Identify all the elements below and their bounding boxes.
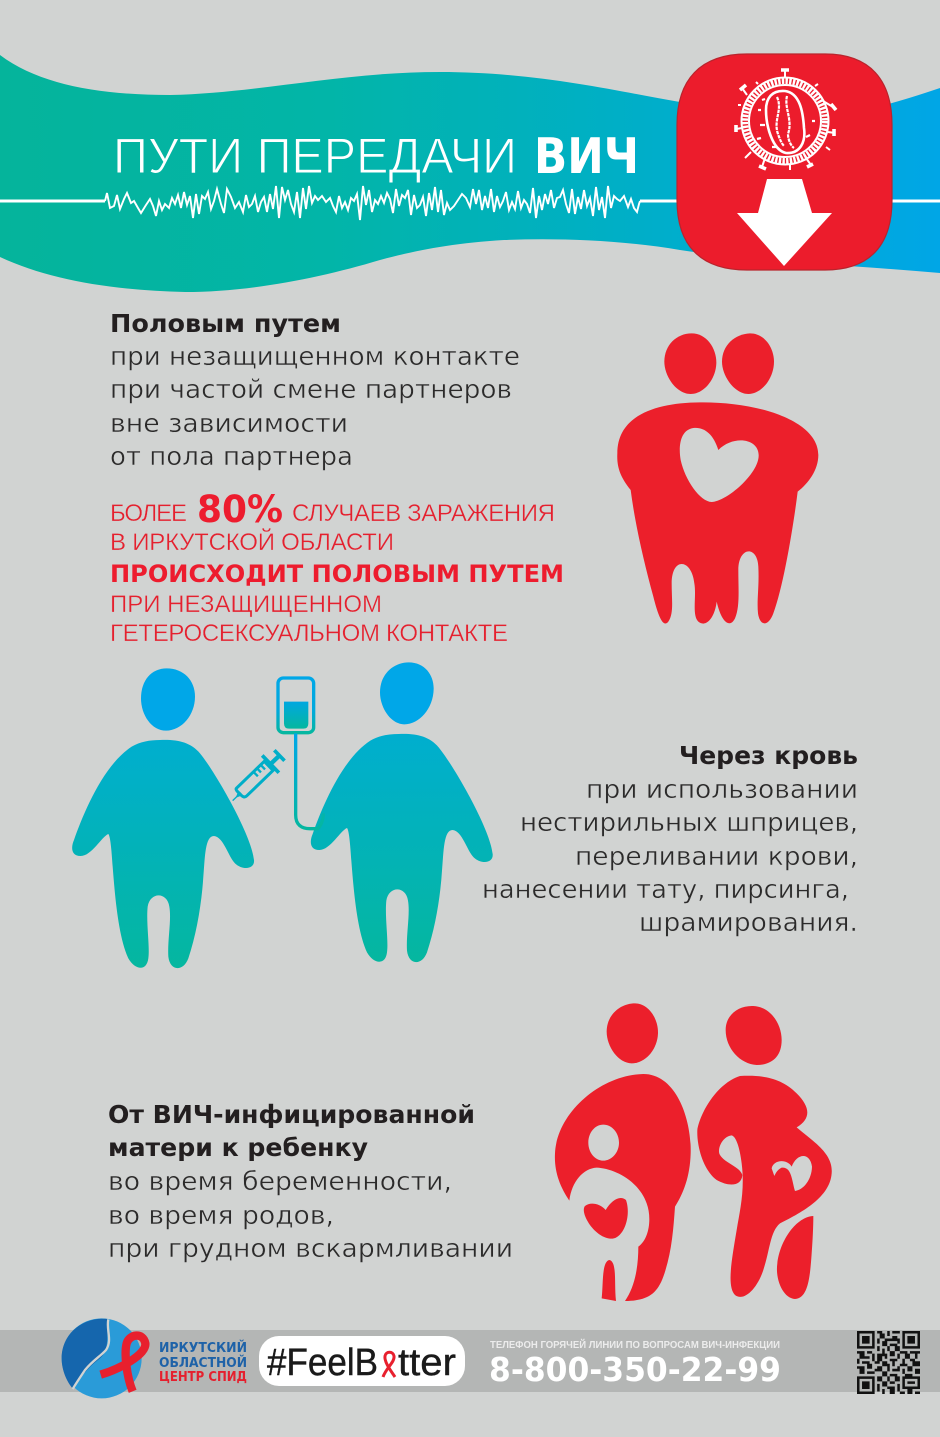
red badge [677, 54, 892, 270]
figure with child [555, 1003, 691, 1301]
text: 80 percent statistic: ГЕТЕРОСЕКСУАЛЬНОМ КОНТАКТЕ [110, 620, 508, 647]
hashtag pill [259, 1336, 465, 1386]
text: 80 percent statistic [110, 488, 564, 647]
logo: regional AIDS centre: ЦЕНТР СПИД [159, 1370, 247, 1385]
icon: HIV virus [736, 70, 836, 170]
hashtag pill: tter [398, 1342, 456, 1384]
text: mother to child transmission: во время родов, [108, 1201, 334, 1231]
text: mother to child transmission: во время беременности, [108, 1167, 452, 1197]
text: blood transmission: нанесении тату, пирсинга, [482, 875, 849, 905]
text: blood transmission: при использовании [586, 775, 858, 805]
text: blood transmission: Через кровь [679, 741, 858, 770]
pregnant figure [697, 1006, 832, 1299]
icon: couple with heart [617, 333, 818, 624]
text: sexual transmission: Половым путем [110, 309, 341, 338]
title: ПУТИ ПЕРЕДАЧИ [113, 128, 517, 184]
person left [72, 668, 254, 968]
icon: IV bag [278, 678, 323, 829]
text: mother to child transmission: От ВИЧ-инфицированной [108, 1100, 475, 1129]
logo: regional AIDS centre: ОБЛАСТНОЙ [159, 1355, 247, 1371]
icon: mother and child figures [555, 1003, 832, 1301]
text: blood transmission [482, 741, 858, 938]
title: ВИЧ [534, 128, 639, 185]
QR code [857, 1331, 920, 1394]
hotline: 8-800-350-22-99 [489, 1350, 781, 1389]
hotline: ТЕЛЕФОН ГОРЯЧЕЙ ЛИНИИ ПО ВОПРОСАМ ВИЧ-ИНФЕКЦИИ [490, 1338, 780, 1351]
hashtag pill: #FeelB [267, 1342, 378, 1384]
icon: two people with syringe and IV drip [72, 662, 493, 968]
icon: syringe [224, 747, 288, 809]
text: mother to child transmission [108, 1100, 513, 1264]
text: sexual transmission: от пола партнера [110, 442, 353, 472]
logo: regional AIDS centre: ИРКУТСКИЙ [159, 1340, 247, 1356]
text: 80 percent statistic: 80% [197, 488, 283, 531]
text: 80 percent statistic: ПРОИСХОДИТ ПОЛОВЫМ ПУТЕМ [110, 560, 564, 588]
header wave banner [0, 55, 940, 292]
text: mother to child transmission: матери к ребенку [108, 1133, 368, 1162]
text: blood transmission: переливании крови, [575, 842, 858, 872]
pulse line [0, 186, 940, 220]
text: sexual transmission: при частой смене партнеров [110, 375, 512, 405]
text: sexual transmission: вне зависимости [110, 409, 348, 439]
text: blood transmission: шрамирования. [639, 908, 858, 938]
text: sexual transmission [110, 309, 520, 472]
logo: regional AIDS centre [62, 1318, 247, 1398]
arrow down [737, 179, 832, 266]
text: mother to child transmission: при грудном вскармливании [108, 1234, 513, 1264]
text: blood transmission: нестирильных шприцев, [520, 808, 858, 838]
person right [311, 662, 493, 962]
text: 80 percent statistic: ПРИ НЕЗАЩИЩЕННОМ [110, 591, 382, 618]
footer band [0, 1330, 940, 1392]
text: 80 percent statistic: СЛУЧАЕВ ЗАРАЖЕНИЯ [292, 500, 555, 527]
text: 80 percent statistic: БОЛЕЕ [110, 500, 187, 527]
text: 80 percent statistic: В ИРКУТСКОЙ ОБЛАСТИ [110, 528, 394, 556]
text: sexual transmission: при незащищенном контакте [110, 342, 520, 372]
